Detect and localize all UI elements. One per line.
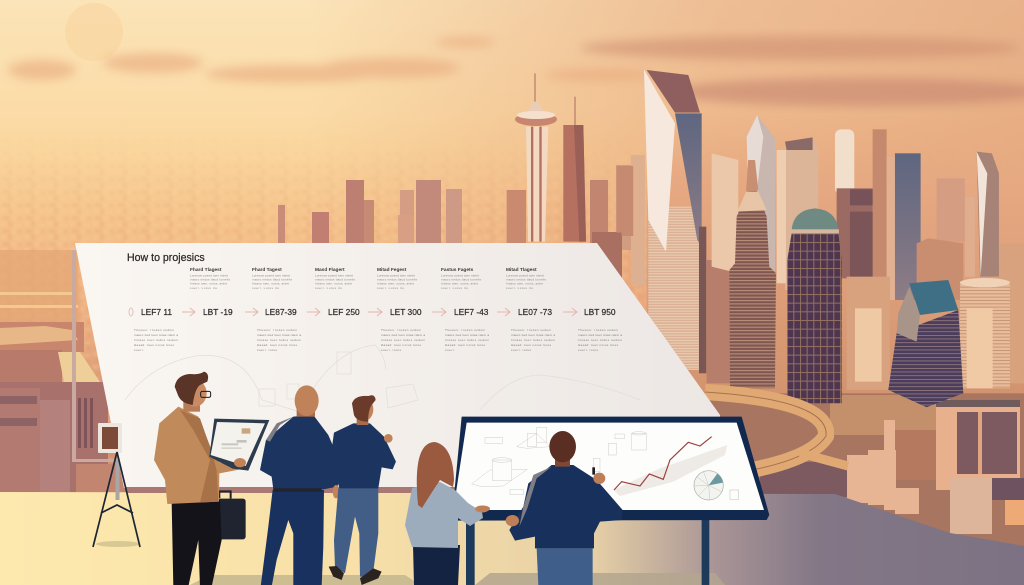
lower column notes: Thesum: l tuden nodum xyxy=(445,328,486,332)
top column body lines: sueri. Lotus itu xyxy=(506,286,533,290)
head xyxy=(295,385,319,417)
man pointing at panel xyxy=(329,395,396,585)
table board with charts xyxy=(453,417,769,585)
sweater xyxy=(405,482,483,548)
lower column notes: Imiaso tuen lodus nedum xyxy=(578,338,622,342)
timeline stage labels: LE87-39 xyxy=(265,307,297,317)
sketch drawings xyxy=(472,427,646,495)
space needle tower xyxy=(515,73,557,242)
top column notes: Fhard Tagest xyxy=(252,267,282,273)
trousers xyxy=(172,500,222,585)
background towers xyxy=(507,115,1024,390)
lower column notes: Thesum: l tuden nodum xyxy=(381,328,422,332)
jacket xyxy=(154,407,246,504)
top column body lines xyxy=(190,274,546,290)
lower column notes: sueri. lotus xyxy=(578,348,598,352)
top column body lines: Loresum posed tuen rdenit xyxy=(506,274,544,278)
top column body lines: Loresum posed tuen rdenit xyxy=(190,274,228,278)
floor xyxy=(0,492,1024,585)
tall glass tower xyxy=(644,69,706,373)
lower column notes: sueri. xyxy=(445,348,455,352)
top column body lines: mauro nedus tlaud tomelis xyxy=(506,278,546,282)
tablet xyxy=(209,419,269,471)
top column body lines: Imiaso tuen, notus, ardet xyxy=(190,282,227,286)
trousers xyxy=(261,490,324,585)
chart ribbon xyxy=(613,445,727,496)
top column body lines: Loresum posed tuen rdenit xyxy=(315,274,353,278)
jacket xyxy=(260,415,343,489)
floor shadows xyxy=(96,541,725,585)
cylinder building xyxy=(960,278,1010,388)
top column notes: Fastus Fagets xyxy=(441,267,474,273)
top column notes: Mitad Tlagest xyxy=(506,267,537,273)
legs xyxy=(466,518,709,585)
top column body lines: Loresum posed tuen rdenit xyxy=(441,274,479,278)
head xyxy=(549,431,576,467)
lower column notes: Imiaso tuen lodus nedum xyxy=(381,338,426,342)
lower column notes: Hasad: tuen notus lores xyxy=(511,343,552,347)
lower column notes: sueri. lotus xyxy=(381,348,402,352)
bald man in navy jacket xyxy=(260,385,343,585)
faint sketches xyxy=(125,345,640,412)
lower column notes: Thesum: l tuden nodum xyxy=(578,328,618,332)
lower column notes: Hasad: tuen notus lores xyxy=(445,343,486,347)
lower column notes: Imiaso tuen lodus nedum xyxy=(134,338,178,342)
stepped tower xyxy=(729,160,776,388)
skyline towers xyxy=(507,69,1024,407)
lower column notes: sueri. xyxy=(134,348,144,352)
timeline stage labels: LET 300 xyxy=(390,307,422,317)
hands and pen xyxy=(477,467,605,526)
top column body lines: Loresum posed tuen rdenit xyxy=(377,274,415,278)
trousers xyxy=(334,487,378,577)
hand xyxy=(475,506,489,512)
woman in grey sweater xyxy=(405,442,489,585)
top column body lines: Imiaso tuen, notus, ardet xyxy=(506,282,543,286)
briefcase xyxy=(218,491,246,539)
top column body lines: Loresum posed tuen rdenit xyxy=(252,274,290,278)
top column body lines: Imiaso tuen, notus, ardet xyxy=(377,282,414,286)
top column body lines: sueri. Lotus itu xyxy=(315,286,342,290)
highway xyxy=(705,392,848,470)
top column notes: Mitad Fegest xyxy=(377,267,407,273)
top column notes: Fhard Tlagest xyxy=(190,267,222,273)
camera on tripod xyxy=(93,423,140,547)
timeline stage labels: LBT 950 xyxy=(584,307,616,317)
top column body lines: sueri. Lotus itu xyxy=(441,286,468,290)
heading: How to projesics xyxy=(127,252,205,264)
timeline stage labels: LE07 -73 xyxy=(518,307,552,317)
distant city texture xyxy=(62,329,118,492)
clouds xyxy=(8,36,1024,106)
lower column notes: mauro ited tuen lotas rdem a xyxy=(134,333,178,337)
timeline start marker xyxy=(129,308,133,316)
top column body lines: Imiaso tuen, notus, ardet xyxy=(315,282,352,286)
haze behind towers xyxy=(647,110,1024,393)
shoes xyxy=(329,566,382,585)
lower-left buildings xyxy=(0,250,126,492)
lower column notes: Imiaso tuen lodus nedum xyxy=(511,338,556,342)
timeline arrows xyxy=(182,308,577,316)
jacket xyxy=(509,465,623,548)
lower column notes xyxy=(134,328,622,352)
man drawing on board xyxy=(477,431,623,585)
lower column notes: mauro ited tuen lotas rdem a xyxy=(578,333,622,337)
lower column notes: sueri. lotus xyxy=(511,348,532,352)
trousers xyxy=(413,545,460,585)
pie chart xyxy=(694,471,723,500)
panel support pole xyxy=(72,250,120,462)
top column body lines: mauro nedus tlaud tomelis xyxy=(315,278,356,282)
top column body lines: mauro nedus tlaud tomelis xyxy=(190,278,230,282)
timeline stage labels xyxy=(141,307,616,317)
midground buildings xyxy=(278,155,645,285)
lower column notes: Thesum: l tuden nodum xyxy=(134,328,174,332)
dome tower xyxy=(787,208,842,403)
top column body lines: Imiaso tuen, notus, ardet xyxy=(252,282,289,286)
lower-right city xyxy=(700,385,1024,550)
hand xyxy=(234,458,246,467)
base strip xyxy=(125,487,720,493)
lower column notes: Hasad: tuen notus lores xyxy=(134,343,174,347)
timeline stage labels: LEF7 -43 xyxy=(454,307,489,317)
top column notes: Masd Flagert xyxy=(315,267,345,273)
lower column notes: mauro ited tuen lotas rdem a xyxy=(257,333,301,337)
lower column notes: Hasad: tuen notus lores xyxy=(578,343,618,347)
main project panel xyxy=(75,243,720,493)
lower column notes: Imiaso tuen lodus nedum xyxy=(445,338,490,342)
pie note xyxy=(730,490,739,499)
head xyxy=(175,372,211,412)
lower column notes: Thesum: l tuden nodum xyxy=(511,328,552,332)
presenter with tablet xyxy=(154,372,269,585)
screen xyxy=(453,423,764,510)
trend line xyxy=(614,437,712,490)
head xyxy=(352,395,376,425)
top column body lines: sueri. Lotus itu xyxy=(377,286,404,290)
lower column notes: mauro ited tuen lotas rdem a xyxy=(511,333,555,337)
top column body lines: mauro nedus tlaud tomelis xyxy=(252,278,292,282)
hair xyxy=(417,442,454,508)
lower column notes: mauro ited tuen lotas rdem a xyxy=(445,333,489,337)
lower column notes: sueri. lotus xyxy=(257,348,278,352)
lower column notes: Imiaso tuen lodus nedum xyxy=(257,338,302,342)
lower column notes: Hasad: tuen notus lores xyxy=(381,343,422,347)
lower column notes: Hasad: tuen notus lores xyxy=(257,343,298,347)
top column body lines: Imiaso tuen, notus, ardet xyxy=(441,282,478,286)
jacket xyxy=(329,423,396,488)
top column body lines: sueri. Lotus itu xyxy=(252,286,279,290)
top column notes xyxy=(190,267,537,273)
office block xyxy=(936,400,1024,500)
pale blocks xyxy=(847,420,919,514)
frame xyxy=(453,417,769,521)
timeline stage labels: LBT -19 xyxy=(203,307,233,317)
timeline stage labels: LEF 250 xyxy=(328,307,360,317)
top column body lines: mauro nedus tlaud tomelis xyxy=(377,278,418,282)
trousers xyxy=(537,548,593,585)
blue roof building xyxy=(888,280,963,407)
top column body lines: sueri. Lotus itu xyxy=(190,286,217,290)
dark slab tower xyxy=(563,97,586,242)
lower column notes: Thesum: l tuden nodum xyxy=(257,328,298,332)
sun xyxy=(65,3,123,61)
top column body lines: mauro nedus tlaud tomelis xyxy=(441,278,482,282)
timeline stage labels: LEF7 11 xyxy=(141,307,172,317)
lower column notes: mauro ited tuen lotas rdem a xyxy=(381,333,425,337)
